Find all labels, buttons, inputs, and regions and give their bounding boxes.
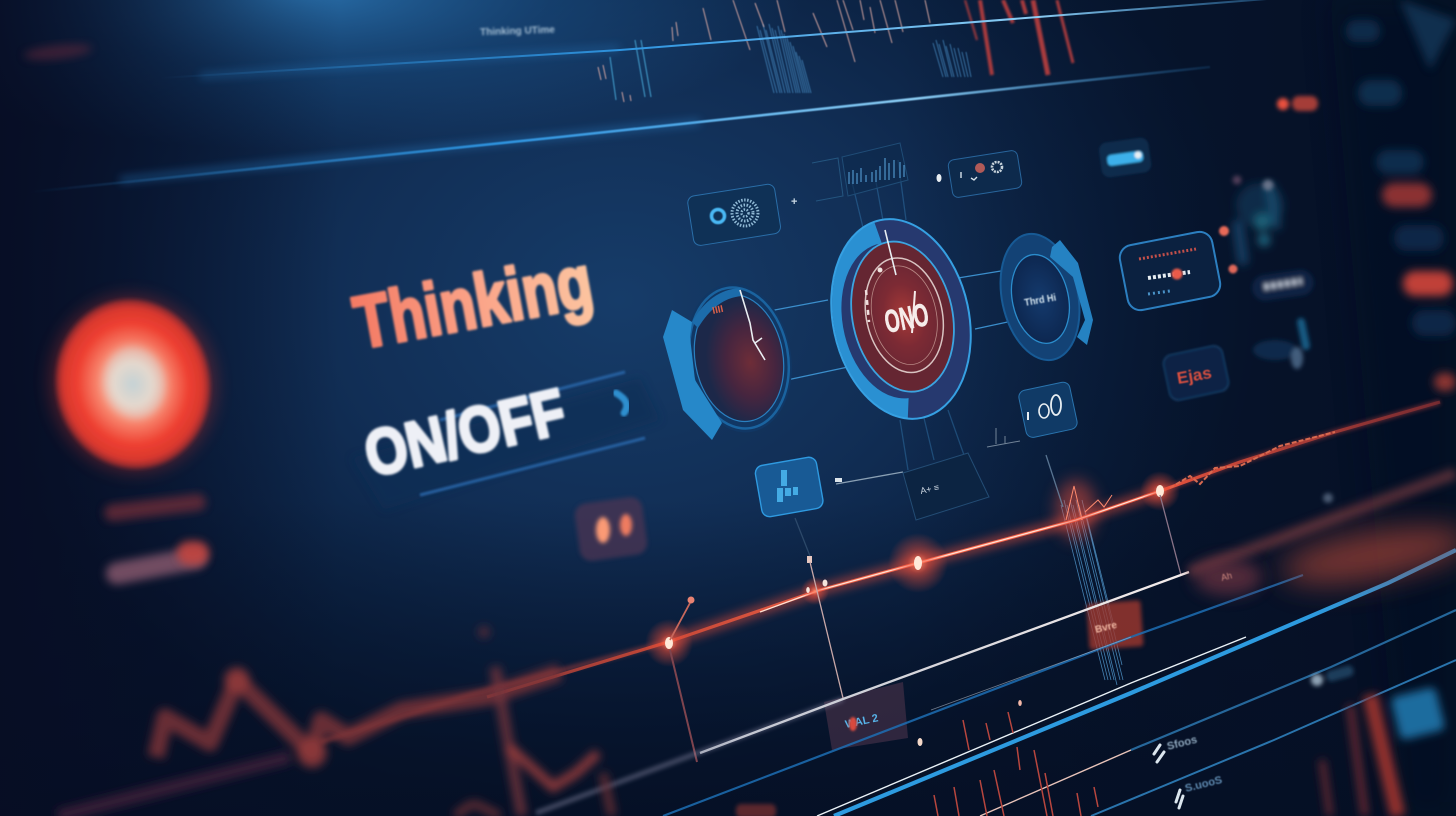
blurred labels under orb [103,493,209,586]
mini bar chart card [812,143,908,201]
right sidebar blurred list [1346,20,1456,391]
small blurred dots [1232,176,1274,190]
blurred blue widget [1253,322,1306,369]
left gauge [663,275,803,441]
blurred right chip [1311,493,1355,686]
node stems [670,455,1181,762]
title: Thinking: Thinking [348,239,599,365]
bottom chip [736,804,776,816]
ON/OFF toggle bar: ON/OFF [358,375,572,491]
blue perspective lines [663,550,1456,816]
blurred red-glyph card [1162,344,1230,402]
small blurred red chip [573,496,649,562]
plus mark: + [791,196,797,208]
center ON/OFF dial [813,206,989,432]
label chip bottom [824,682,908,750]
top blurred waveform chart [598,0,1073,102]
red glow spike [1056,480,1112,540]
blurred side widgets [1236,183,1284,260]
blurred top-left red label [23,41,93,63]
right gauge label: Thrd Hi [1024,293,1057,309]
icon card: status glyphs [947,150,1023,198]
center dial label: ONO [881,296,932,340]
small icon card: rings [1018,381,1078,439]
status dot [936,174,942,182]
bottom list labels [1154,734,1223,808]
right gauge blue bracket [1050,240,1093,345]
top horizon lines [30,0,1330,192]
icon card: blue bars [754,456,824,518]
slider panel card [1118,230,1222,312]
label chip bottom: WAL 2 [844,712,879,731]
blurred red-glyph card: Ejas [1175,363,1213,388]
red chip on line: Bvre [1094,620,1119,636]
top right cyan chip [1098,137,1152,178]
top right blurred triangle [1400,0,1456,70]
vertical waveform column [1061,500,1123,685]
icon card: spiral and dotted sphere [687,183,782,246]
blurred bottom right bars [1322,687,1446,816]
left gauge: IIII [711,304,725,317]
right gauge [990,226,1093,368]
left gauge needle [740,290,765,360]
bottom waveform spikes [934,712,1098,816]
blurred dotted pill [1250,268,1315,302]
top right red chip [1277,96,1318,111]
small chart marks [987,428,1020,447]
outlined chart card [903,453,989,520]
bottom list labels: Sfoos [1166,734,1198,753]
red signal line with glowing nodes [320,402,1440,742]
signal nodes [645,471,1180,667]
ON/OFF toggle bar [352,372,660,510]
blurred bottom-left red trend line [58,626,612,816]
red chip on line [1086,600,1144,650]
red power orb [32,279,234,489]
line from blue card [836,472,903,484]
top heading: small blurred text: Thinking UTime [480,25,555,38]
white timeline line [536,473,1456,813]
bottom list labels: S.uooS [1184,774,1223,795]
left gauge blue bracket [663,310,722,440]
red blurred swoosh [1194,515,1456,595]
red blurred swoosh: Ah [1220,570,1233,583]
connector lines for gauges [764,160,1017,470]
outlined chart card: A+ ≡ [919,482,940,496]
red dots [1219,226,1238,274]
